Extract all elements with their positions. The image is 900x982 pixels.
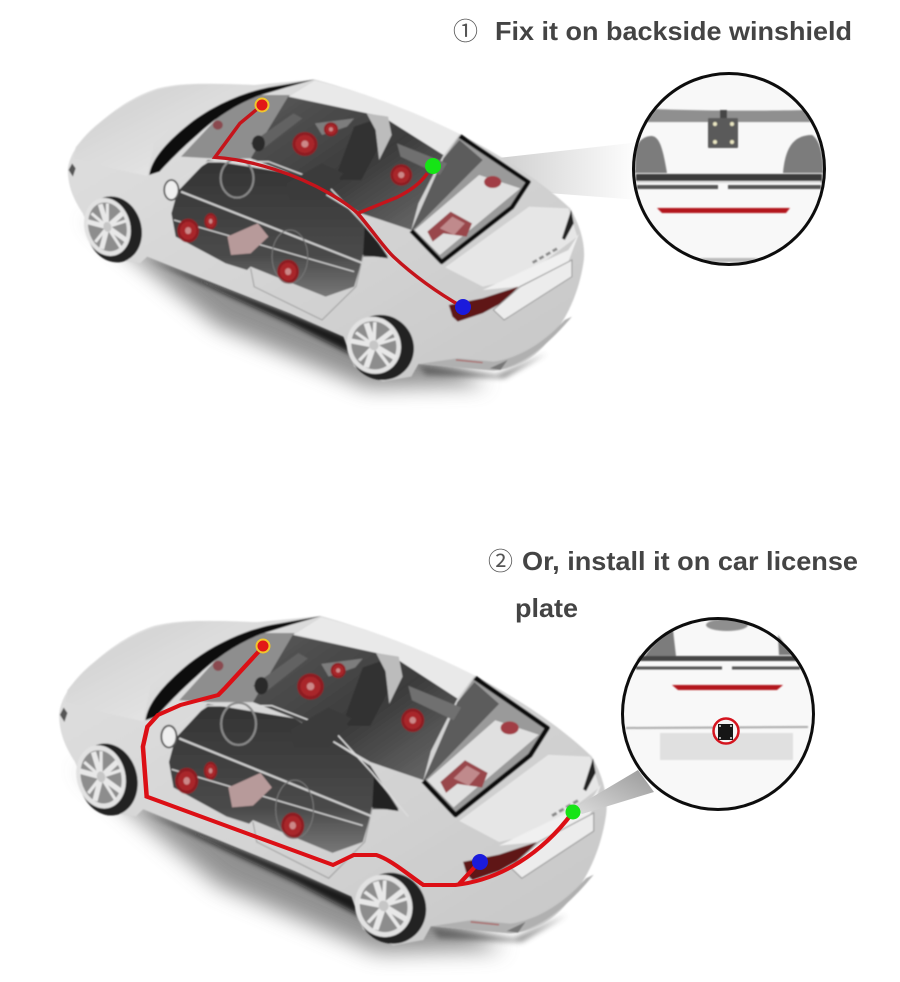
heading: step 1 (453, 16, 852, 46)
car body cutaway (59, 616, 607, 953)
red highlight ring (714, 718, 738, 744)
rear deck strip (637, 656, 798, 661)
license plate (660, 733, 793, 760)
camera LEDs (719, 725, 732, 739)
step 2 instruction continued: plate (515, 593, 578, 623)
bottom strip (700, 258, 758, 262)
marker: reverse light point (455, 299, 471, 315)
rear seat left (645, 630, 676, 656)
detail circle 1: camera on rear windshield (634, 74, 824, 264)
circle outline (634, 74, 824, 264)
trunk line (626, 727, 808, 728)
camera bracket (720, 110, 727, 118)
marker: power point (256, 640, 270, 652)
camera body (708, 118, 738, 148)
car body cutaway (68, 79, 584, 388)
trunk seam (637, 185, 821, 189)
mirror shape (706, 619, 748, 631)
rear seat right (778, 635, 792, 655)
step 1 instruction: Fix it on backside winshield (495, 16, 852, 46)
deck highlight (636, 181, 821, 183)
circle outline (622, 618, 814, 810)
step number 1: ① (453, 18, 478, 46)
detail circle 2: camera on license plate (622, 618, 814, 810)
detail artwork 1 (635, 109, 823, 262)
windshield top strip (645, 109, 812, 122)
rear seat left (635, 136, 667, 173)
third brake light (672, 685, 783, 690)
step 2 instruction: Or, install it on car license (522, 546, 858, 576)
rear seat right (783, 135, 823, 173)
marker: reverse light point (472, 854, 488, 870)
third brake light (657, 208, 790, 213)
circle background (623, 619, 813, 809)
marker: camera point (425, 158, 441, 174)
light beam to detail 1 (498, 142, 640, 200)
light beam to detail 2 (574, 770, 654, 814)
trunk seam (636, 666, 800, 670)
marker: power point (256, 98, 268, 112)
red cable route (215, 105, 463, 307)
detail artwork 2 (626, 619, 808, 760)
step number 2: ② (488, 548, 513, 576)
camera LEDs (713, 122, 734, 144)
camera body (718, 724, 733, 740)
car illustration: license plate mounting (59, 616, 654, 953)
rear deck strip (636, 174, 822, 183)
red cable route (143, 646, 572, 885)
marker: camera point (566, 804, 580, 820)
car illustration: windshield mounting (68, 79, 584, 388)
circle background (634, 74, 824, 264)
heading: step 2 (488, 546, 858, 623)
